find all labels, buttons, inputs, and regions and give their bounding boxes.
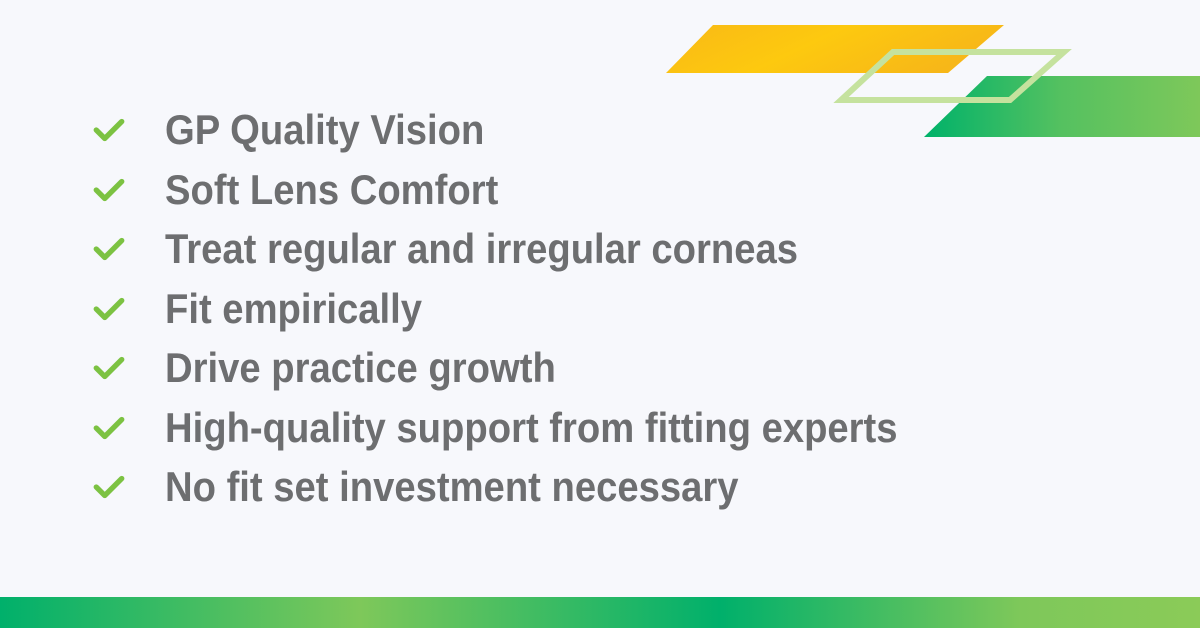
item 7: No fit set investment necessary [165,463,739,510]
green parallelogram [924,76,1200,137]
item 6: High-quality support from fitting experts [165,404,898,451]
item 1: GP Quality Vision [165,106,484,153]
checklist [94,106,898,510]
yellow parallelogram [666,25,1004,73]
outline parallelogram [841,52,1064,100]
bottom band [0,597,1200,628]
item 2: Soft Lens Comfort [165,166,498,213]
item 3: Treat regular and irregular corneas [165,225,798,272]
item 5: Drive practice growth [165,344,556,391]
item 4: Fit empirically [165,285,422,332]
